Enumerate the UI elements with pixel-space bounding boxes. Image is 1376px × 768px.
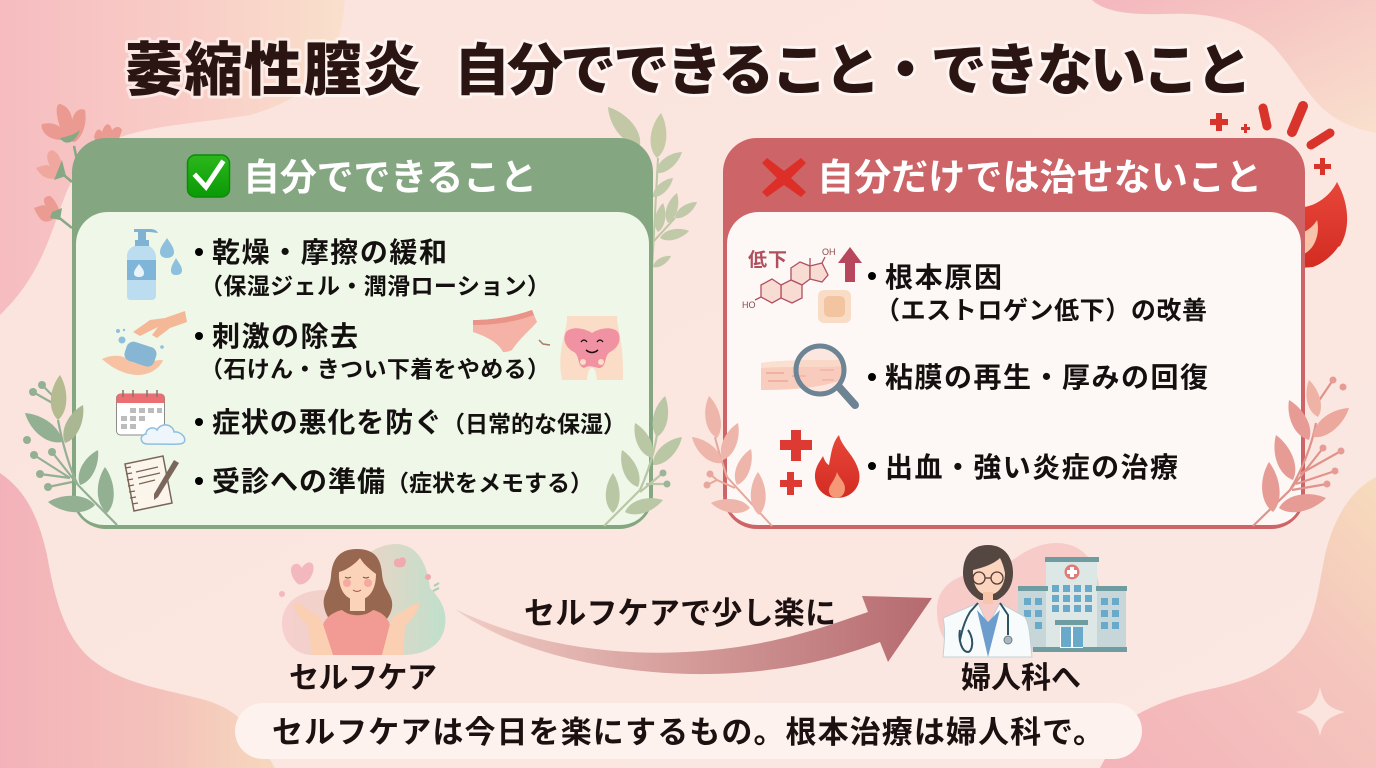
banner: conclusion bbox=[235, 703, 1142, 759]
item: root cause: （エストロゲン低下）の改善 bbox=[875, 297, 1207, 325]
item: prevent worsening bbox=[195, 407, 626, 438]
item: dryness bbox=[195, 237, 550, 299]
decoration: olive branch lower-right of left panel bbox=[604, 395, 687, 526]
item: prepare for visit bbox=[195, 466, 593, 497]
item: dryness: （保湿ジェル・潤滑ローション） bbox=[200, 273, 550, 299]
item: remove irritation bbox=[195, 321, 550, 382]
item: bleeding and inflammation: 出血・強い炎症の治療 bbox=[885, 452, 1178, 483]
label: gynecology: 婦人科へ bbox=[961, 662, 1081, 695]
icon: estrogen molecule, arrow and patch: HO bbox=[742, 300, 756, 310]
icon: notebook and pen bbox=[125, 456, 179, 511]
item: dryness: 乾燥・摩擦の緩和 bbox=[212, 237, 447, 268]
item: prepare for visit: （症状をメモする） bbox=[386, 470, 593, 496]
hospital bbox=[1018, 557, 1127, 652]
icon: hands with soap bbox=[102, 311, 187, 375]
panel: cannot treat alone bbox=[723, 138, 1305, 529]
icon: smiling pelvis bbox=[560, 316, 623, 380]
panel heading: cannot: 自分だけでは治せないこと bbox=[817, 157, 1262, 198]
title: 自分でできること・できないこと bbox=[454, 39, 1252, 102]
icon: red crosses and flame bbox=[780, 430, 859, 498]
decoration: green branch lower-left bbox=[20, 375, 117, 525]
illustration: woman doing self-care bbox=[279, 544, 445, 655]
icon: estrogen molecule, arrow and patch bbox=[742, 247, 862, 323]
icon: estrogen molecule, arrow and patch: OH bbox=[822, 247, 836, 257]
title bbox=[125, 38, 1252, 103]
icon: mucosa under magnifier bbox=[761, 346, 855, 405]
decoration: pink flowers top-left bbox=[34, 104, 122, 228]
item: root cause bbox=[868, 262, 1207, 325]
title: 萎縮性膣炎 bbox=[125, 38, 421, 103]
doctor bbox=[943, 545, 1032, 657]
arrow label: セルフケアで少し楽に bbox=[524, 596, 836, 631]
icon: underwear bbox=[473, 310, 550, 352]
decoration: olive leaves top-right of left panel bbox=[601, 102, 700, 270]
banner: conclusion: セルフケアは今日を楽にするもの。根本治療は婦人科で。 bbox=[272, 715, 1104, 750]
decoration: pink branch on right panel left bbox=[687, 395, 772, 526]
icon: calendar and cloud bbox=[116, 390, 185, 444]
icon: estrogen molecule, arrow and patch: 低下 bbox=[748, 249, 787, 271]
item: root cause: 根本原因 bbox=[885, 262, 1002, 293]
decoration: pink branch lower-right bbox=[1253, 376, 1354, 526]
item: remove irritation: 刺激の除去 bbox=[212, 321, 358, 352]
icon: red cross mark bbox=[762, 158, 806, 197]
illustration: doctor and hospital bbox=[937, 543, 1127, 657]
arrow: self-care to gynecology bbox=[455, 596, 932, 674]
item: prepare for visit: 受診への準備 bbox=[212, 466, 385, 497]
sparkle bbox=[1296, 687, 1345, 736]
icon: pump bottle and drops bbox=[127, 229, 182, 300]
item: mucosa regeneration: 粘膜の再生・厚みの回復 bbox=[885, 362, 1208, 393]
item: prevent worsening: 症状の悪化を防ぐ bbox=[212, 407, 442, 438]
decoration: red sparks bbox=[1210, 106, 1331, 175]
item: prevent worsening: （日常的な保湿） bbox=[442, 411, 626, 437]
icon: check mark bbox=[188, 155, 230, 197]
label: self-care: セルフケア bbox=[289, 662, 437, 695]
panel heading: can do: 自分でできること bbox=[243, 157, 537, 198]
panel: self-care (can do) bbox=[72, 138, 653, 529]
item: remove irritation: （石けん・きつい下着をやめる） bbox=[200, 356, 550, 382]
decoration: flame behind right panel bbox=[1300, 182, 1347, 268]
